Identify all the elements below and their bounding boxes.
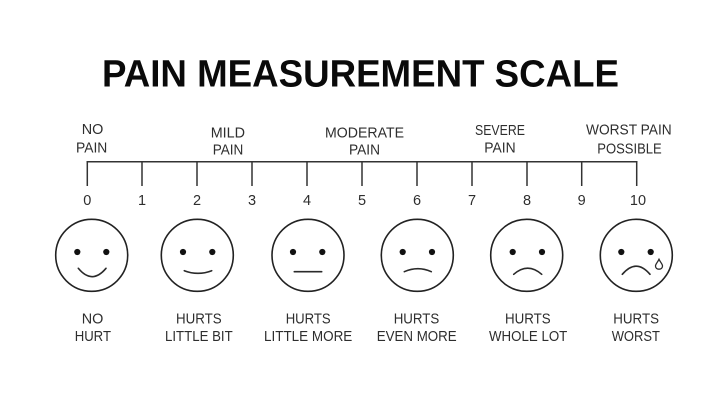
face: hurts worst with tear	[600, 219, 672, 291]
label: severe pain: PAIN	[484, 140, 516, 156]
title: PAIN MEASUREMENT SCALE	[102, 54, 619, 96]
caption: hurts whole lot: HURTS	[505, 311, 551, 327]
caption: no hurt: NO	[82, 311, 103, 327]
caption: no hurt: HURT	[75, 329, 111, 345]
caption: hurts little bit: HURTS	[176, 311, 222, 327]
caption: hurts even more: HURTS	[394, 311, 439, 327]
label: moderate pain: MODERATE	[325, 125, 404, 141]
face: hurts even more	[381, 219, 453, 291]
face: hurts whole lot	[491, 219, 563, 291]
caption: hurts little more	[264, 311, 353, 345]
scale numbers: 4	[303, 193, 311, 209]
face: no hurt	[56, 219, 128, 291]
scale numbers: 9	[578, 193, 586, 209]
scale numbers: 0	[83, 193, 91, 209]
caption: hurts little bit	[165, 311, 233, 345]
label: moderate pain	[325, 125, 404, 158]
icon: tear drop	[656, 259, 662, 269]
caption: hurts little more: HURTS	[286, 311, 331, 327]
label: severe pain	[475, 123, 525, 156]
label: moderate pain: PAIN	[349, 142, 380, 158]
label: worst pain possible	[586, 122, 672, 157]
scale numbers: 6	[413, 193, 421, 209]
caption: hurts little more: LITTLE MORE	[264, 329, 353, 345]
scale numbers: 2	[193, 193, 201, 209]
label: no pain: NO	[82, 122, 103, 138]
label: no pain: PAIN	[76, 141, 107, 157]
label: worst pain possible: WORST PAIN	[586, 122, 672, 138]
face: hurts little more	[272, 219, 344, 291]
label: no pain	[76, 122, 107, 157]
caption: hurts whole lot	[489, 311, 567, 345]
scale numbers	[83, 193, 646, 209]
caption: hurts whole lot: WHOLE LOT	[489, 329, 567, 345]
caption: hurts worst: WORST	[612, 329, 660, 345]
scale numbers: 1	[138, 193, 146, 209]
label: mild pain: MILD	[211, 125, 245, 141]
scale numbers: 8	[523, 193, 531, 209]
scale numbers: 3	[248, 193, 256, 209]
caption: hurts even more: EVEN MORE	[377, 329, 457, 345]
scale axis with ticks	[87, 161, 637, 186]
caption: hurts worst	[612, 311, 660, 345]
scale numbers: 5	[358, 193, 366, 209]
caption: no hurt	[75, 311, 111, 345]
label: severe pain: SEVERE	[475, 123, 525, 139]
scale numbers: 7	[468, 193, 476, 209]
scale category labels	[76, 122, 672, 158]
label: mild pain	[211, 125, 245, 158]
caption: hurts worst: HURTS	[613, 311, 659, 327]
scale numbers: 10	[630, 193, 646, 209]
caption: hurts even more	[377, 311, 457, 345]
face: hurts little bit	[161, 219, 233, 291]
label: mild pain: PAIN	[213, 142, 243, 158]
caption: hurts little bit: LITTLE BIT	[165, 329, 233, 345]
label: worst pain possible: POSSIBLE	[597, 141, 662, 157]
